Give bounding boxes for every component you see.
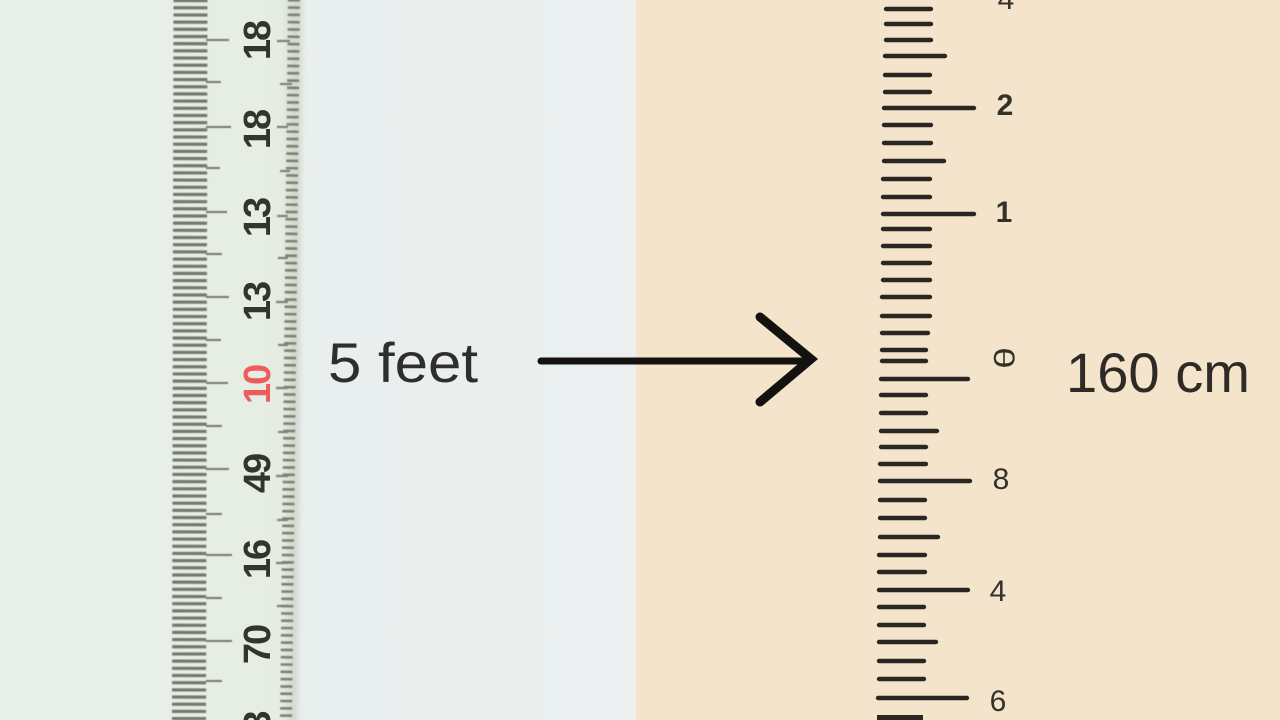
- metric numerals: 1: [996, 196, 1012, 229]
- thick bottom tick: [877, 715, 923, 720]
- metric numerals: 4: [990, 575, 1006, 608]
- metric ruler: [877, 0, 1020, 720]
- numeral centre bar: [1003, 349, 1005, 367]
- metric numerals: [987, 0, 1020, 718]
- label: 160 cm: 160 cm: [1066, 341, 1250, 404]
- tape numerals: [237, 21, 279, 720]
- red highlighted numeral: 10: [237, 365, 279, 404]
- metric numerals: 0: [987, 348, 1020, 368]
- tape numerals: 49: [237, 454, 279, 493]
- tape numerals: 18: [237, 21, 279, 60]
- arrow head: [760, 317, 811, 402]
- metric tick marks: [878, 9, 974, 698]
- panel: left feet background: [0, 0, 636, 720]
- tape measure: imperial ruler: [168, 0, 303, 720]
- tape numerals: 16: [237, 540, 279, 579]
- right tick marks: [276, 0, 294, 720]
- label: 5 feet: 5 feet: [328, 331, 478, 394]
- metric numerals: 2: [997, 89, 1013, 122]
- arrow shaft: [541, 358, 808, 364]
- panel: right centimetre background: [636, 0, 1280, 720]
- left tick marks: [189, 0, 232, 720]
- metric numerals: 8: [993, 463, 1009, 496]
- tape body: [168, 0, 303, 720]
- arrow: [541, 317, 811, 402]
- tape numerals: 18: [237, 110, 279, 149]
- tape numerals: 13: [237, 282, 279, 321]
- tape numerals: 13: [237, 198, 279, 237]
- tape numerals: 70: [237, 625, 279, 664]
- metric numerals: 6: [990, 685, 1006, 718]
